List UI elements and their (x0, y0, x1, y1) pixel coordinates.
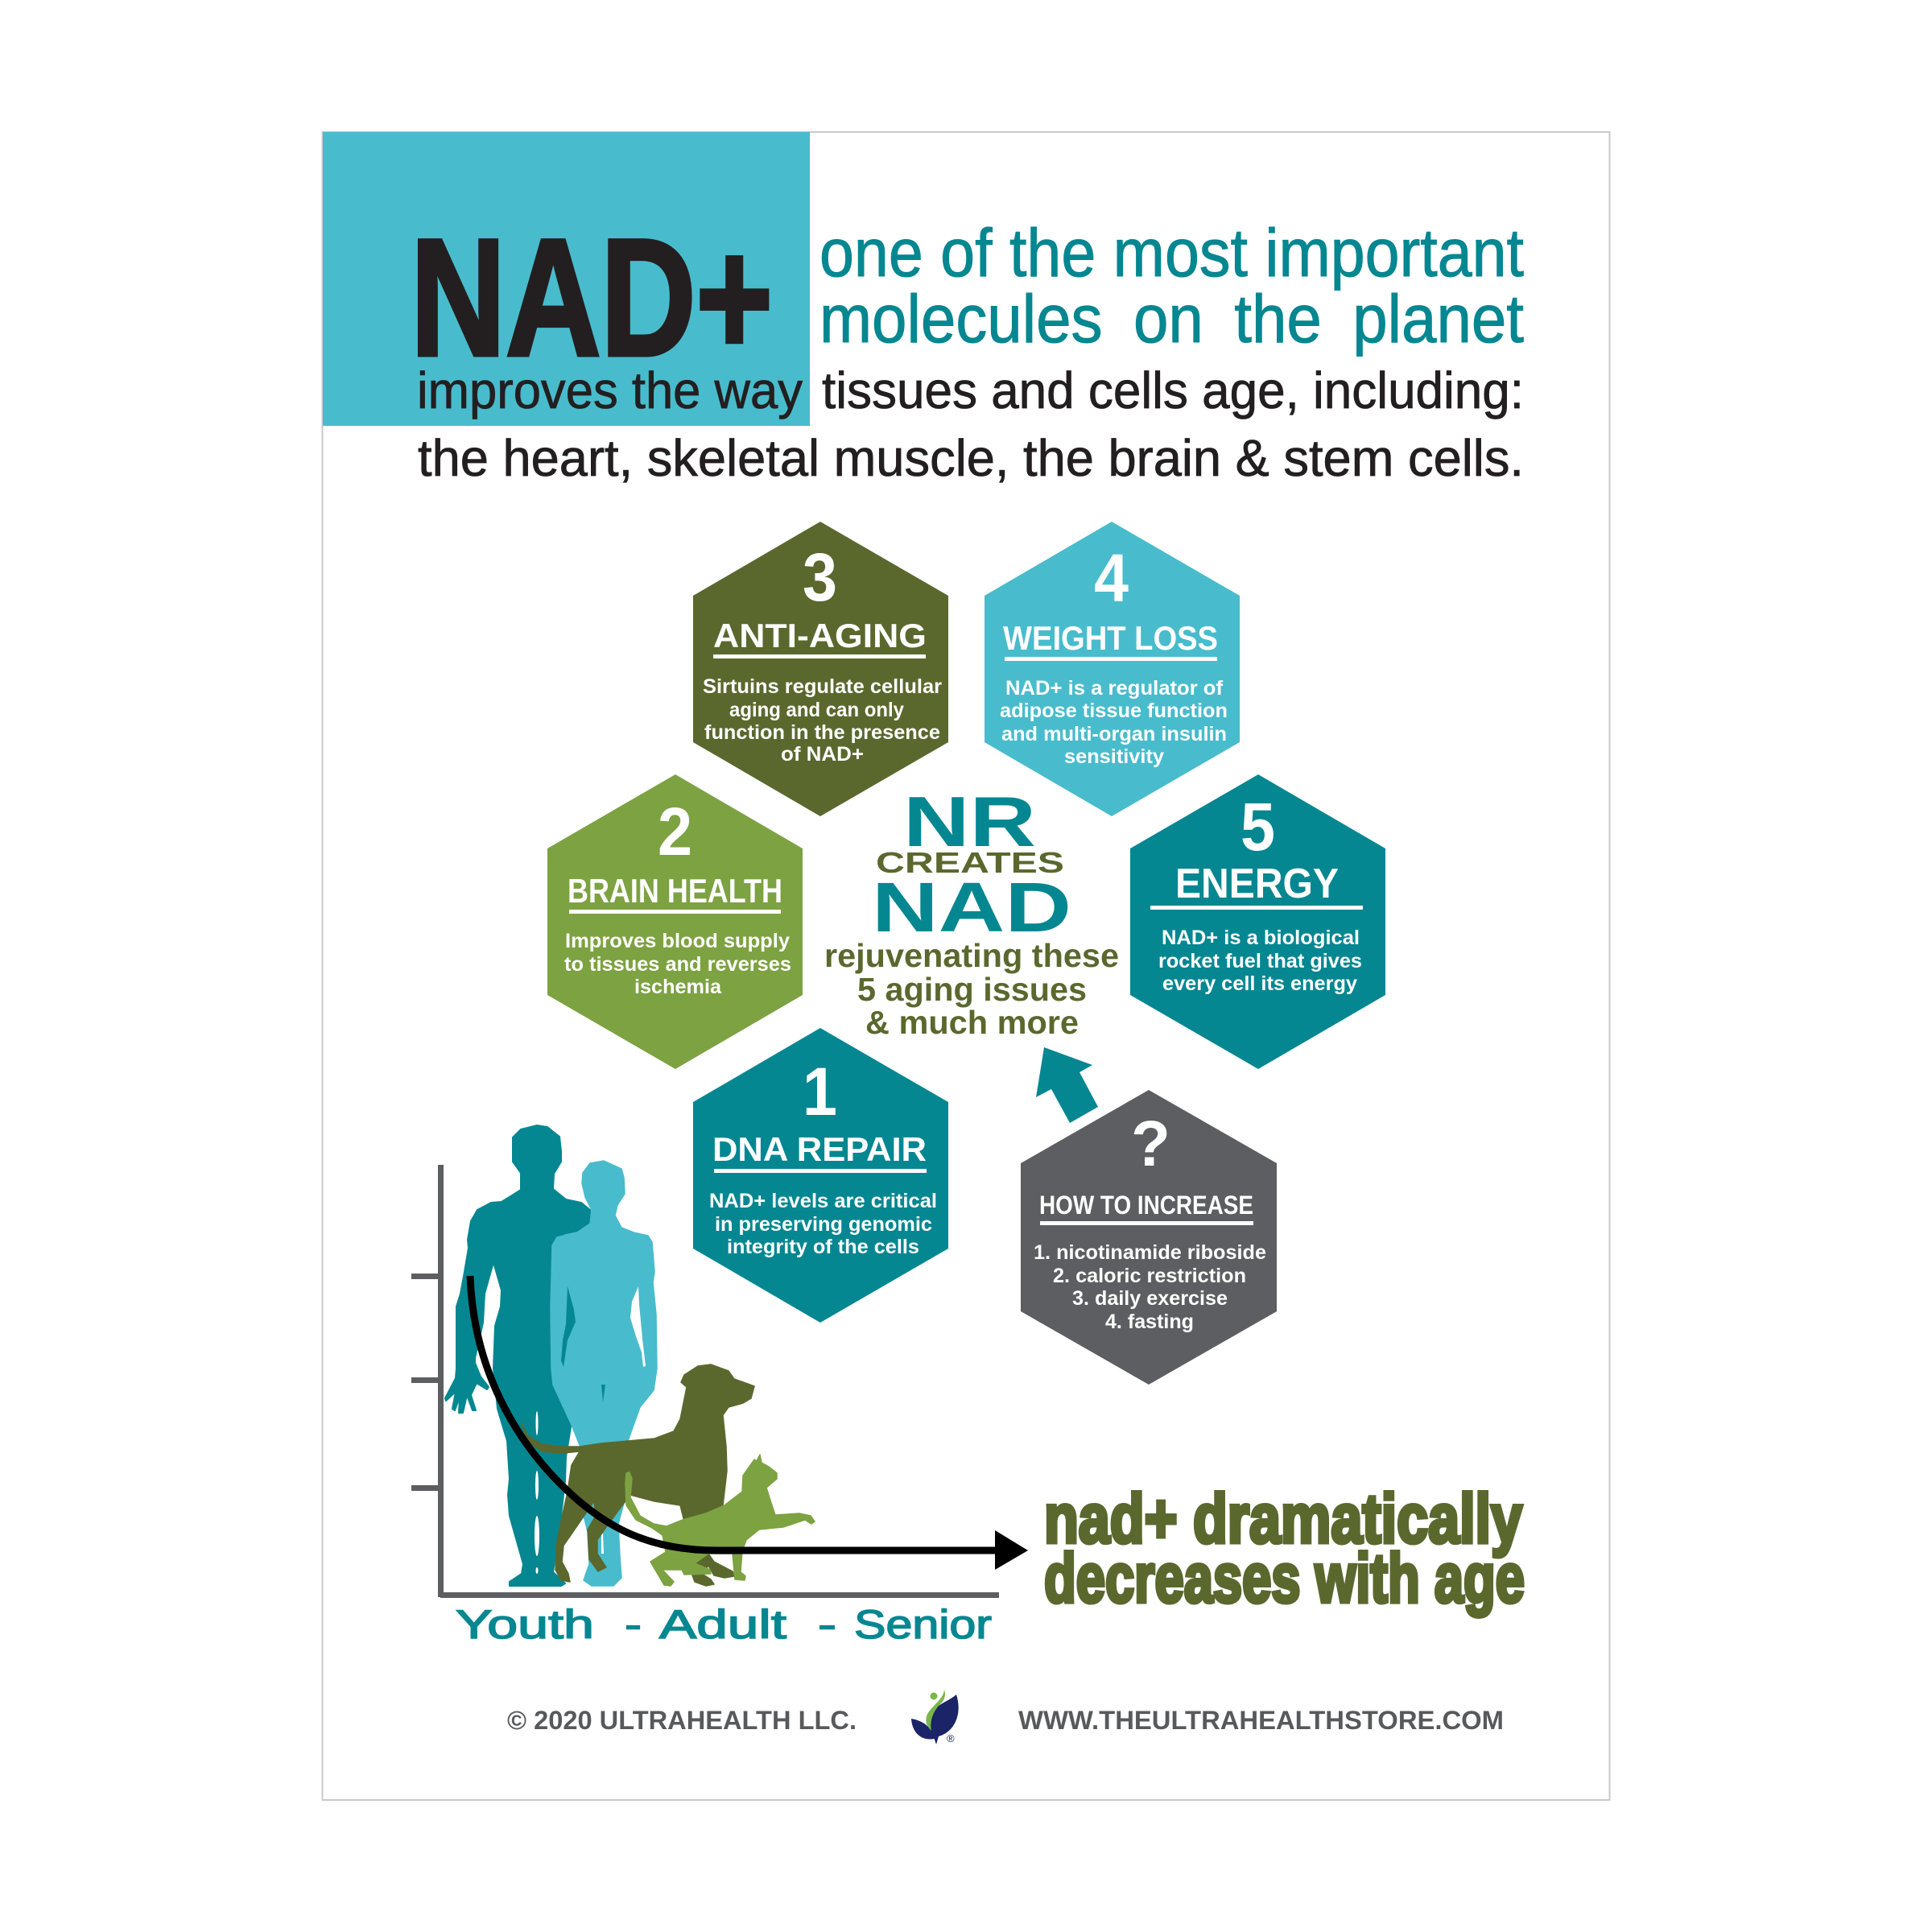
panel: 4 weight loss: WEIGHT LOSS (1003, 619, 1218, 657)
panel: how to increase: 1. nicotinamide riboside (1034, 1241, 1266, 1264)
intro text (417, 361, 1524, 487)
icon: man silhouette (445, 1125, 591, 1586)
callout: nad+ decreases with age: nad+ dramatically (1044, 1480, 1522, 1558)
panel: 2 brain health: ischemia (634, 976, 722, 998)
header block (323, 132, 810, 426)
intro text: improves the way (417, 361, 803, 419)
panel: 2 brain health (547, 774, 803, 1069)
intro text: tissues and cells age, including: (822, 361, 1524, 419)
panel: 3 anti-aging: of NAD+ (781, 743, 864, 766)
axes (411, 1165, 999, 1598)
panel: 5 energy: NAD+ is a biological (1162, 927, 1360, 949)
center message: CREATES (876, 846, 1064, 879)
subtitle (819, 215, 1524, 357)
icon: cat silhouette (625, 1455, 815, 1586)
panel: 3 anti-aging: Sirtuins regulate cellular (703, 675, 942, 698)
footer copyright: © 2020 ULTRAHEALTH LLC. (507, 1706, 857, 1735)
panel: how to increase: 4. fasting (1105, 1311, 1194, 1333)
panel: 3 anti-aging: function in the presence (704, 721, 940, 744)
panel: 2 brain health: Improves blood supply (565, 930, 790, 952)
panel: 3 anti-aging: aging and can only (729, 699, 904, 721)
panel: 4 weight loss: sensitivity (1064, 745, 1164, 768)
panel: how to increase: ? (1131, 1108, 1170, 1179)
age labels: Adult (659, 1602, 786, 1647)
panel: 5 energy: ENERGY (1175, 861, 1339, 907)
title: NAD+: NAD+ (411, 204, 773, 390)
panel: 1 dna repair: in preserving genomic (715, 1213, 932, 1236)
icon: logo: ® (947, 1732, 955, 1744)
center message: NR (903, 782, 1036, 861)
panel: 2 brain health: BRAIN HEALTH (568, 872, 782, 910)
subtitle: molecules on the planet (819, 281, 1524, 357)
panel: 4 weight loss: adipose tissue function (1000, 700, 1228, 722)
callout: nad+ decreases with age (1044, 1480, 1525, 1617)
callout: nad+ decreases with age: decreases with age (1044, 1540, 1525, 1617)
intro text: the heart, skeletal muscle, the brain & stem cells. (418, 429, 1524, 487)
panel: how to increase: HOW TO INCREASE (1039, 1191, 1253, 1220)
age labels: Senior (854, 1602, 992, 1647)
icon: woman silhouette (551, 1161, 657, 1586)
panel: 3 anti-aging (693, 522, 948, 816)
panel: 3 anti-aging: 3 (803, 539, 837, 615)
panel: 2 brain health: 2 (658, 794, 692, 869)
center message: 5 aging issues (857, 971, 1087, 1008)
panel: how to increase: 2. caloric restriction (1053, 1265, 1246, 1287)
age labels: - (818, 1602, 836, 1647)
panel: 1 dna repair: NAD+ levels are critical (709, 1190, 937, 1212)
panel: 1 dna repair: 1 (803, 1054, 837, 1129)
icon: logo (911, 1690, 959, 1744)
center message: NAD (872, 869, 1071, 947)
age labels (456, 1602, 992, 1647)
panel: how to increase: 3. daily exercise (1072, 1287, 1228, 1310)
panel: 4 weight loss: and multi-organ insulin (1001, 723, 1227, 745)
panel: 5 energy: every cell its energy (1162, 972, 1357, 995)
panel: 1 dna repair: integrity of the cells (727, 1236, 919, 1258)
panel: 2 brain health: to tissues and reverses (564, 953, 791, 976)
footer website: WWW.THEULTRAHEALTHSTORE.COM (1018, 1706, 1504, 1735)
panel: 1 dna repair (693, 1028, 948, 1323)
panel: 3 anti-aging: ANTI-AGING (713, 617, 927, 654)
card border (322, 132, 1610, 1800)
age labels: - (625, 1602, 642, 1647)
panel: how to increase (1021, 1090, 1277, 1385)
panel: 4 weight loss (985, 522, 1240, 816)
panel: 1 dna repair: DNA REPAIR (712, 1130, 927, 1168)
panel: 5 energy: rocket fuel that gives (1158, 950, 1362, 972)
arrow: how to increase to center (1036, 1047, 1098, 1123)
center message: & much more (865, 1004, 1079, 1041)
subtitle: one of the most important (819, 215, 1524, 291)
center message (824, 782, 1119, 1041)
chart: NAD decline with age (411, 1125, 1028, 1647)
center message: rejuvenating these (824, 937, 1119, 974)
panel: 4 weight loss: NAD+ is a regulator of (1005, 677, 1224, 700)
curve and arrow (470, 1276, 1028, 1570)
panel: 5 energy (1130, 774, 1385, 1069)
panel: 4 weight loss: 4 (1094, 540, 1129, 616)
age labels: Youth (456, 1602, 594, 1647)
panel: 5 energy: 5 (1241, 789, 1275, 865)
icon: dog silhouette (522, 1364, 754, 1586)
